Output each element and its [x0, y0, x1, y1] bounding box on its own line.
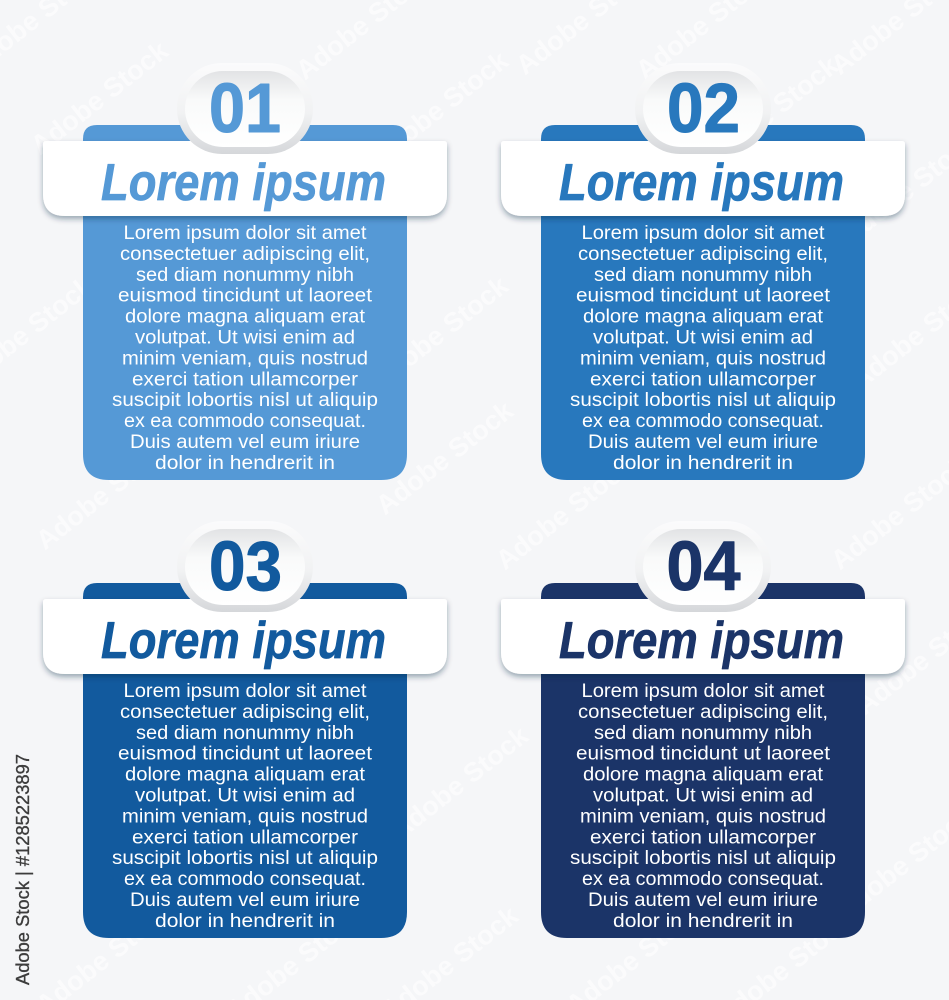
card 03 blue body [83, 583, 407, 938]
card 02 white title band [501, 141, 905, 216]
card 02 number badge [635, 63, 771, 154]
panel: card 03 [43, 521, 447, 938]
card 01 body text: Duis autem vel eum iriure [130, 432, 360, 453]
card 03 body text: Duis autem vel eum iriure [130, 890, 360, 911]
panel: card 04 [501, 521, 905, 938]
card 01 body text: consectetuer adipiscing elit, [120, 244, 370, 265]
card 01 heading: Lorem ipsum [101, 154, 386, 212]
card 01 body text: exerci tation ullamcorper [132, 369, 359, 390]
faint stock watermarks on background: Adobe Stock [370, 395, 519, 521]
card 04 body text: Lorem ipsum dolor sit amet [582, 681, 825, 702]
card 03 body text: dolore magna aliquam erat [125, 765, 366, 786]
card 04 body text: dolor in hendrerit in [613, 911, 793, 932]
card 02 blue body [541, 125, 865, 480]
card 02 body text: volutpat. Ut wisi enim ad [593, 328, 813, 348]
card 04 body text [570, 681, 836, 932]
card 02 number badge: 02 [667, 69, 740, 147]
card 02 body text: exerci tation ullamcorper [590, 369, 817, 390]
faint stock watermarks on background: Adobe Stock [25, 35, 174, 161]
faint stock watermarks on background: Adobe Stock [695, 50, 844, 176]
card 01 body text: suscipit lobortis nisl ut aliquip [112, 390, 378, 411]
panel: card 02 [501, 63, 905, 480]
vertical stock credit: Adobe Stock | #1285223897 [12, 754, 33, 985]
card 01 number badge: 01 [209, 69, 281, 147]
card 04 body text: Duis autem vel eum iriure [588, 890, 818, 911]
faint stock watermarks on background: Adobe Stock [30, 430, 179, 556]
card 01 blue body [83, 125, 407, 480]
card 04 body text: dolore magna aliquam erat [583, 765, 824, 786]
card 02 body text: dolor in hendrerit in [613, 453, 793, 474]
card 02 body text: dolore magna aliquam erat [583, 307, 824, 328]
card 01 body text: sed diam nonummy nibh [136, 265, 354, 286]
card 04 white title band [501, 599, 905, 674]
card 01 white title band [43, 141, 447, 216]
card 04 body text: consectetuer adipiscing elit, [578, 702, 828, 723]
card 04 body text: suscipit lobortis nisl ut aliquip [570, 848, 836, 869]
card 03 body text: Lorem ipsum dolor sit amet [124, 681, 367, 702]
card 03 number badge [177, 521, 313, 612]
card 02 body text: sed diam nonummy nibh [594, 265, 812, 286]
card 01 body text: ex ea commodo consequat. [124, 411, 366, 432]
card 02 body text: Lorem ipsum dolor sit amet [582, 223, 825, 244]
card 02 body text: euismod tincidunt ut laoreet [576, 286, 831, 307]
card 01 body text [112, 223, 378, 474]
card 03 body text: ex ea commodo consequat. [124, 869, 366, 890]
card 01 number badge [177, 63, 313, 154]
panel: card 01 [43, 63, 447, 480]
card 03 body text: minim veniam, quis nostrud [122, 806, 368, 827]
card 04 body text: sed diam nonummy nibh [594, 723, 812, 744]
card 02 heading: Lorem ipsum [559, 154, 844, 212]
card 04 heading: Lorem ipsum [559, 612, 844, 670]
card 03 body text [112, 681, 378, 932]
card 03 body text: suscipit lobortis nisl ut aliquip [112, 848, 378, 869]
faint stock watermarks on background: Adobe Stock [365, 45, 514, 171]
card 03 number badge: 03 [209, 527, 282, 605]
card 04 body text: euismod tincidunt ut laoreet [576, 744, 831, 765]
card 03 body text: volutpat. Ut wisi enim ad [135, 786, 355, 806]
card 04 number badge [635, 521, 771, 612]
card 01 body text: minim veniam, quis nostrud [122, 348, 368, 369]
card 03 body text: euismod tincidunt ut laoreet [118, 744, 373, 765]
faint stock watermarks on background: Adobe Stock [385, 720, 534, 846]
card 04 number badge: 04 [666, 527, 741, 605]
card 04 navy body [541, 583, 865, 938]
card 02 body text: Duis autem vel eum iriure [588, 432, 818, 453]
card 03 body text: dolor in hendrerit in [155, 911, 335, 932]
card 04 body text: ex ea commodo consequat. [582, 869, 824, 890]
card 01 body text: euismod tincidunt ut laoreet [118, 286, 373, 307]
card 02 body text: consectetuer adipiscing elit, [578, 244, 828, 265]
card 02 body text [570, 223, 836, 474]
faint stock watermarks on background: Adobe Stock [365, 270, 514, 396]
card 03 body text: exerci tation ullamcorper [132, 827, 359, 848]
card 01 body text: dolore magna aliquam erat [125, 307, 366, 328]
card 04 body text: exerci tation ullamcorper [590, 827, 817, 848]
card 04 body text: volutpat. Ut wisi enim ad [593, 786, 813, 806]
card 03 body text: sed diam nonummy nibh [136, 723, 354, 744]
card 02 body text: ex ea commodo consequat. [582, 411, 824, 432]
card 03 white title band [43, 599, 447, 674]
faint stock watermarks on background: Adobe Stock [490, 450, 639, 576]
card 02 body text: minim veniam, quis nostrud [580, 348, 826, 369]
card 01 body text: dolor in hendrerit in [155, 453, 335, 474]
card 01 body text: Lorem ipsum dolor sit amet [124, 223, 367, 244]
card 04 body text: minim veniam, quis nostrud [580, 806, 826, 827]
card 01 body text: volutpat. Ut wisi enim ad [135, 328, 355, 348]
card 03 body text: consectetuer adipiscing elit, [120, 702, 370, 723]
card 03 heading: Lorem ipsum [101, 612, 386, 670]
card 02 body text: suscipit lobortis nisl ut aliquip [570, 390, 836, 411]
